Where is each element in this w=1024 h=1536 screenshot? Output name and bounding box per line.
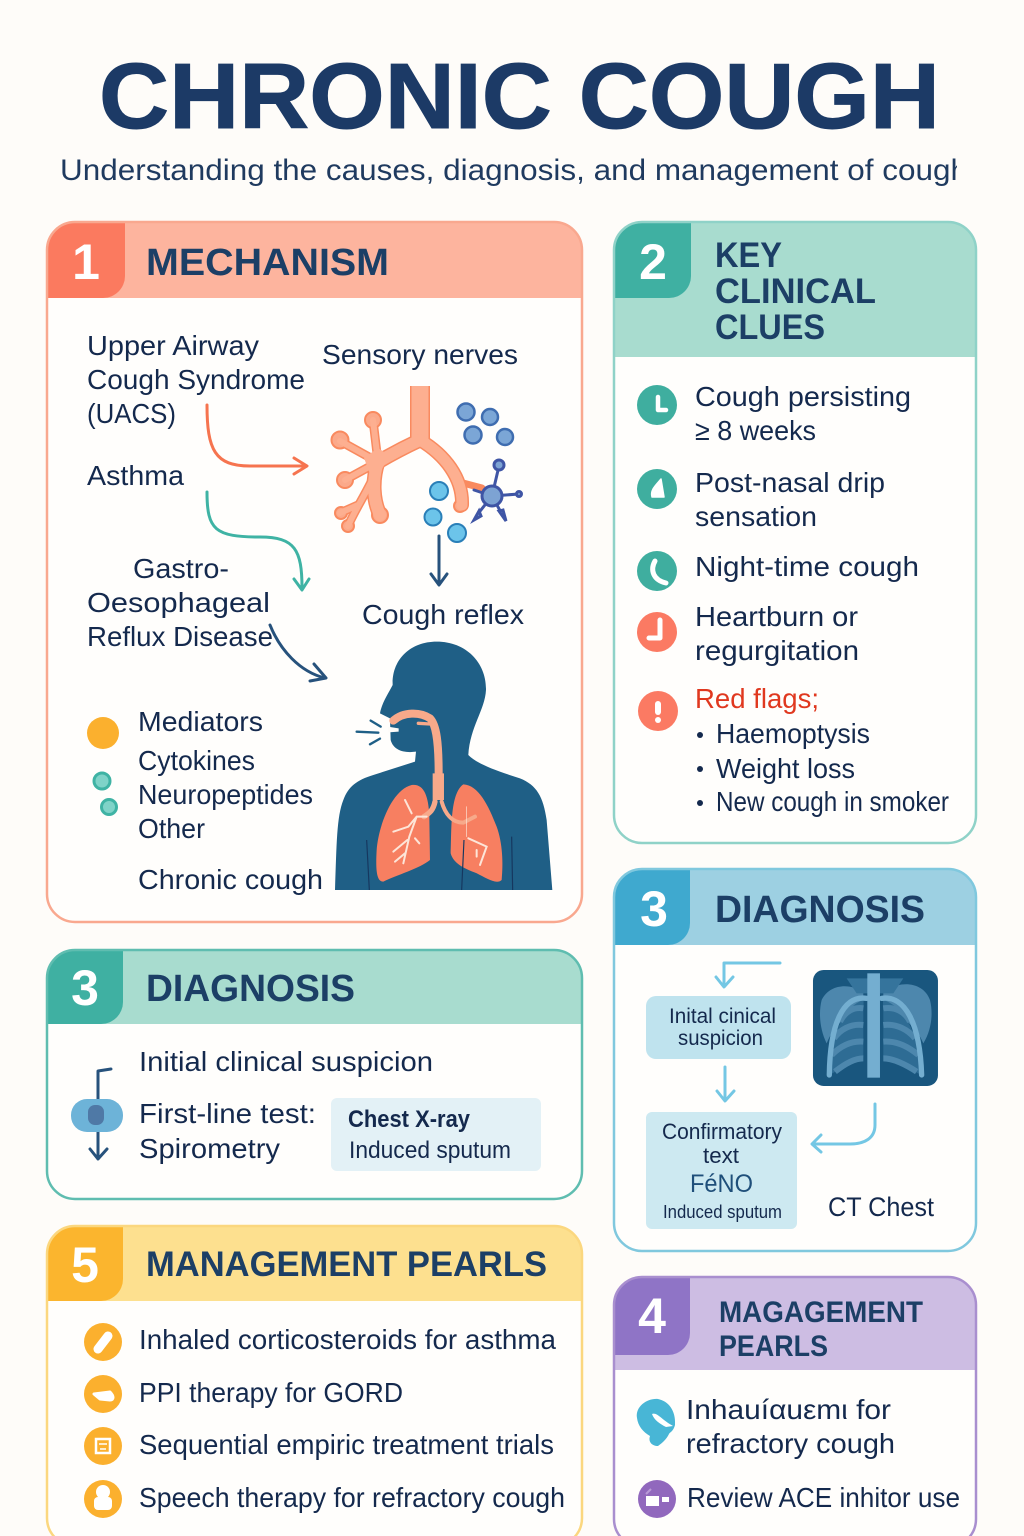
panel: diagnosis left [47,950,582,1199]
icon: inhaler [84,1323,122,1361]
pearl: speech: Speech therapy for refractory cough [139,1482,565,1513]
pearl: sequential: Sequential empiric treatment trials [139,1429,554,1460]
panel: management pearls right [614,1277,976,1536]
clue: heartburn: regurgitation [695,635,859,666]
clue: heartburn [695,601,859,666]
management header band [47,1226,582,1301]
legend: mediators: Cytokines [138,745,255,776]
arrow: to cough reflex [431,536,447,585]
clue: night-time: Night-time cough [695,551,919,582]
right management heading: MAGAGEMENT [719,1296,923,1329]
clue: persisting [695,381,911,446]
right management number tab: 4 [638,1288,666,1344]
right diagnosis heading: DIAGNOSIS [715,889,925,931]
box: confirmatory test: text [703,1143,739,1168]
icon: nerve cell [474,460,522,521]
cause: GORD: Oesophageal [87,587,270,618]
diagnosis header band [47,950,582,1024]
cause: GORD [87,553,273,652]
panel: management pearls left [47,1226,582,1536]
right management number tab [614,1277,690,1355]
label: sensory nerves: Sensory nerves [322,339,518,370]
clue: post-nasal drip: sensation [695,501,817,532]
right management heading [719,1296,923,1363]
icon: mediator particles [424,482,466,542]
clues number tab [614,222,691,298]
clues heading: CLUES [715,308,825,347]
right diagnosis header band [614,869,976,945]
diagnosis steps [139,1046,433,1164]
icon: spirometer [71,1069,123,1159]
clues heading: CLINICAL [715,272,876,311]
box: initial suspicion: suspicion [678,1027,763,1050]
pearl: inhalation [686,1394,895,1459]
icon: drip [637,469,677,509]
legend: mediators: Other [138,813,205,844]
diagnosis steps: Spirometry [139,1133,280,1164]
management number tab [47,1226,123,1301]
box: confirmatory test: Induced sputum [663,1202,782,1222]
cause: GORD: Gastro- [133,553,229,584]
red flags list [695,683,949,817]
arrow: orange [207,405,307,474]
box: confirmatory test: FéNO [690,1170,753,1198]
subtitle: Understanding the causes, diagnosis, and management of cough [60,154,968,187]
cause: GORD: Reflux Disease [87,621,273,652]
icon: alert [638,691,678,731]
cause: asthma: Asthma [87,460,184,491]
diagnosis number tab [47,950,123,1024]
clues heading: KEY [715,236,782,275]
icon: chest x-ray [813,970,938,1086]
right diagnosis number tab [614,869,690,945]
legend: mediators [87,706,313,844]
cause: UACS: (UACS) [87,398,176,429]
diagnosis steps: Initial clinical suspicion [139,1046,433,1077]
box: confirmatory test [646,1112,797,1229]
clue: post-nasal drip [695,467,885,532]
mechanism number tab: 1 [72,234,100,290]
icon: clock [637,385,677,425]
label: CT chest: CT Chest [828,1192,934,1222]
red flags list: Haemoptysis [716,718,870,749]
clues number tab: 2 [639,234,667,290]
mechanism number tab [47,222,125,298]
legend: mediators: Neuropeptides [138,779,313,810]
title: CHRONIC COUGH [99,44,940,148]
cause: UACS: Cough Syndrome [87,364,305,395]
box: confirmatory test: Confirmatory [662,1119,782,1144]
icon: person with lungs [335,642,552,890]
management heading: MANAGEMENT PEARLS [146,1245,547,1284]
mechanism header band [47,222,582,298]
right management heading: PEARLS [719,1330,828,1363]
pearl: ACE: Review ACE inhitor use [687,1482,960,1513]
panel: mechanism [47,222,582,922]
arrow: x-ray to confirmatory [812,1104,875,1152]
management number tab: 5 [71,1237,99,1293]
icon: speech person [84,1480,122,1518]
pearl: corticosteroids: Inhaled corticosteroids for asthma [139,1324,556,1355]
cause: UACS: Upper Airway [87,330,259,361]
right diagnosis number tab: 3 [640,881,668,937]
clue: heartburn: Heartburn or [695,601,858,632]
panel: diagnosis right [614,869,976,1251]
red flags list: New cough in smoker [716,786,949,817]
legend: mediators: Mediators [138,706,263,737]
icon: inhalation [637,1399,675,1446]
icon: sequence card [84,1427,122,1465]
diagnosis steps: First-line test: [139,1098,316,1129]
label: cough reflex: Cough reflex [362,599,524,630]
arrow: navy [270,625,326,681]
icon: moon [637,551,677,591]
box: initial suspicion [646,996,791,1059]
diagnosis heading: DIAGNOSIS [146,968,355,1010]
clue: persisting: ≥ 8 weeks [695,415,816,446]
clues heading [715,236,876,347]
pearl: inhalation: Inhauíαuεmι for [686,1394,891,1425]
icon: ACE review [638,1480,676,1518]
right management header band [614,1277,976,1370]
icon: heartburn [637,612,677,652]
label: chronic cough: Chronic cough [138,864,323,895]
callout: tests: Chest X-ray [348,1106,471,1133]
panel: key clinical clues [614,222,976,843]
mechanism heading: MECHANISM [146,242,389,284]
pearl: PPI: PPI therapy for GORD [139,1377,403,1408]
box: initial suspicion: Inital cinical [669,1005,776,1028]
clue: post-nasal drip: Post-nasal drip [695,467,885,498]
clues header band [614,222,976,357]
callout: tests [331,1098,541,1171]
icon: bronchial tree [332,386,482,532]
diagnosis number tab: 3 [71,960,99,1016]
arrow: to confirmatory [717,1067,734,1101]
arrow: into suspicion [716,963,780,987]
red flags list: Red flags; [695,683,819,714]
arrow: teal [207,492,309,590]
red flags list: Weight loss [716,753,855,784]
clue: persisting: Cough persisting [695,381,911,412]
callout: tests: Induced sputum [349,1137,511,1164]
icon: pill [84,1375,122,1413]
icon: blue cells [458,404,513,445]
pearl: inhalation: refractory cough [686,1428,895,1459]
cause: UACS [87,330,305,429]
